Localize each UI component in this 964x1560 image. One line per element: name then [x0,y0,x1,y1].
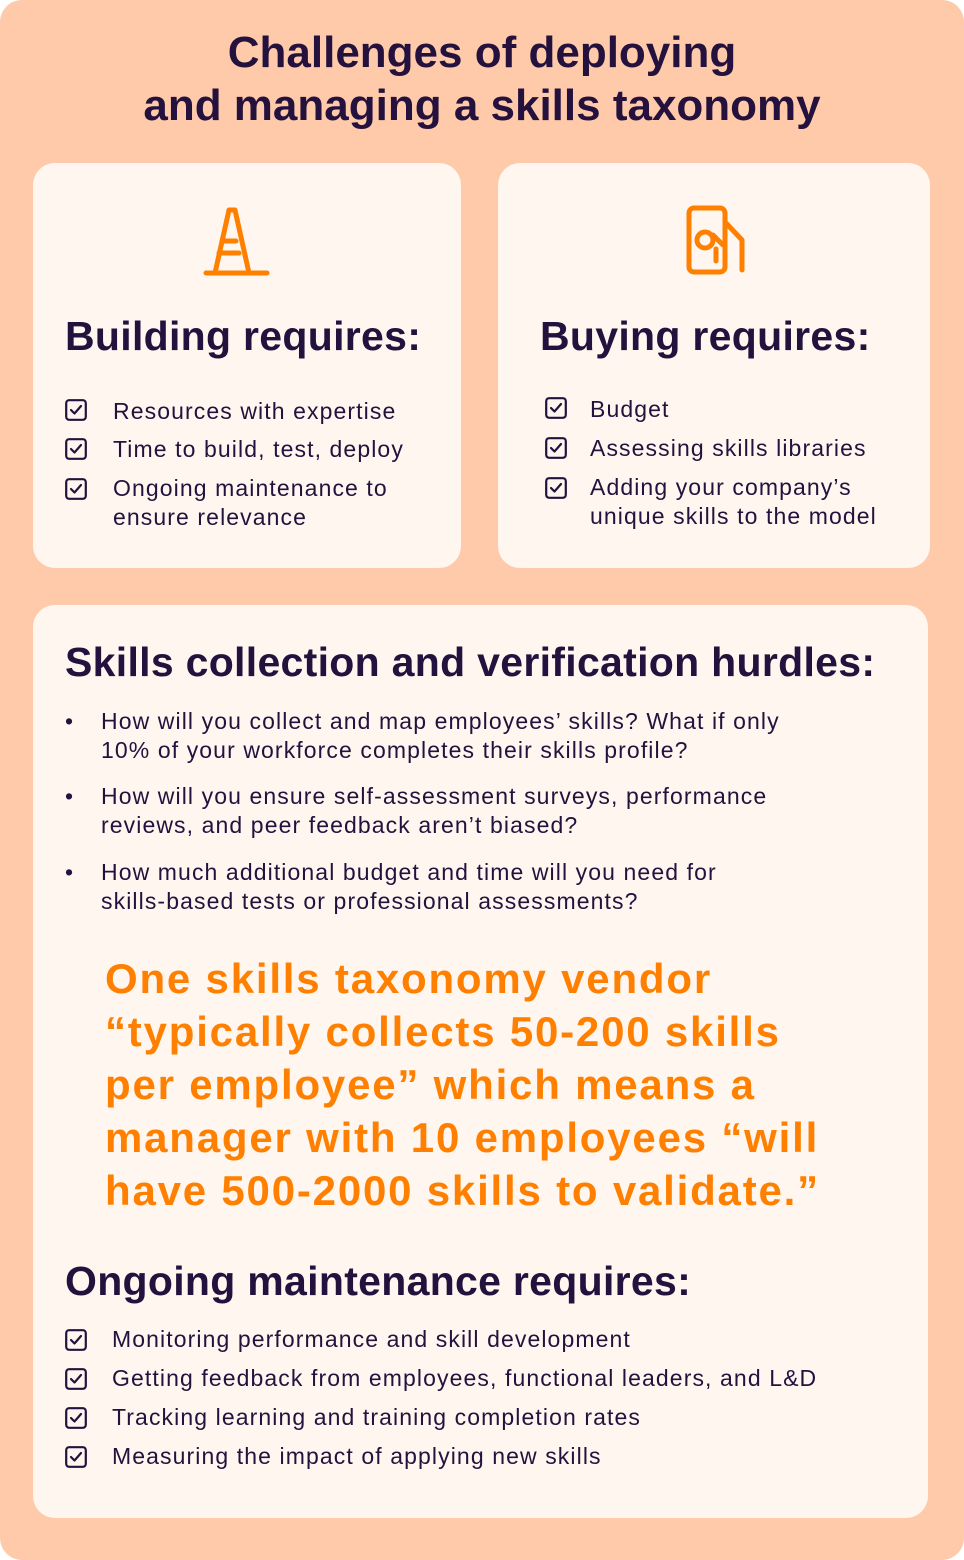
bullet list: hurdles: How will you ensure self-assessment surveys, performance [101,783,767,809]
bullet list: hurdles: • [65,783,74,809]
list: building: Ongoing maintenance to [113,475,388,501]
panel: hurdles and maintenance [33,605,928,1518]
callout: quote [105,955,820,1214]
list: maintenance [65,1326,817,1469]
bullet list: hurdles: reviews, and peer feedback aren’t biased? [101,812,578,838]
title: and managing a skills taxonomy [143,81,821,130]
title: Challenges of deploying [228,28,736,77]
list: maintenance: Monitoring performance and skill development [112,1326,631,1352]
icon: traffic cone [204,208,270,276]
list: building: Resources with expertise [113,398,396,424]
list: maintenance: Measuring the impact of applying new skills [112,1443,602,1469]
callout: quote: One skills taxonomy vendor [105,955,712,1002]
list: maintenance: Tracking learning and training completion rates [112,1404,641,1430]
heading: hurdles: Skills collection and verification hurdles: [65,639,875,685]
bullet list: hurdles: • [65,708,74,734]
bullet list: hurdles: How much additional budget and time will you need for [101,859,717,885]
panel: building [33,163,461,568]
panel: buying [498,163,930,568]
list: building: ensure relevance [113,504,307,530]
list: buying: Adding your company’s [590,474,852,500]
bullet list: hurdles: skills-based tests or professional assessments? [101,888,638,914]
heading: building: Building requires: [65,313,421,359]
list: building: Time to build, test, deploy [113,436,404,462]
bullet list: hurdles: 10% of your workforce completes their skills profile? [101,737,689,763]
callout: quote: have 500-2000 skills to validate.” [105,1167,820,1214]
icon: money in hand [686,206,744,274]
callout: quote: manager with 10 employees “will [105,1114,819,1161]
list: building [65,398,404,530]
list: maintenance: Getting feedback from employees, functional leaders, and L&D [112,1365,817,1391]
list: buying: Budget [590,396,670,422]
bullet list: hurdles: How will you collect and map employees’ skills? What if only [101,708,780,734]
list: buying: unique skills to the model [590,503,877,529]
heading: maintenance: Ongoing maintenance requires: [65,1258,691,1304]
callout: quote: “typically collects 50-200 skills [105,1008,781,1055]
bullet list: hurdles [65,708,780,914]
bullet list: hurdles: • [65,859,74,885]
list: buying [545,396,877,529]
heading: buying: Buying requires: [540,313,871,359]
callout: quote: per employee” which means a [105,1061,756,1108]
list: buying: Assessing skills libraries [590,435,867,461]
title [143,28,821,130]
